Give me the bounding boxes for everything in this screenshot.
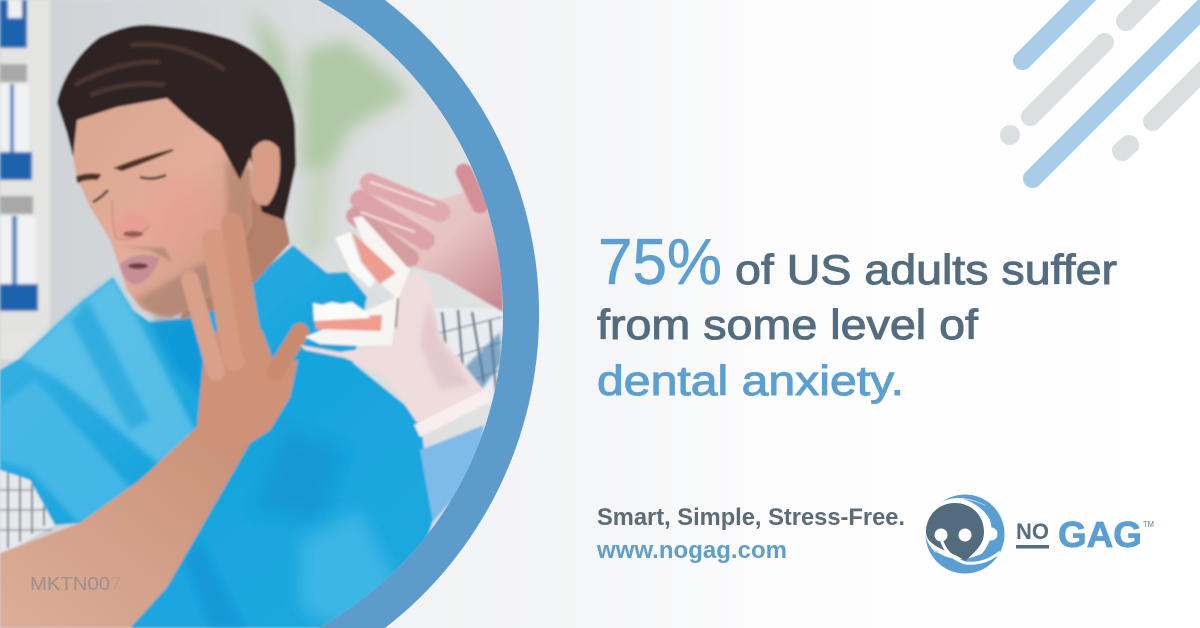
logo: No Gag [925,494,1154,574]
hair [57,25,295,180]
plaid shirt, patient's right [435,308,503,404]
nose [112,200,150,239]
website: www.nogag.com [596,537,787,564]
blurred plant [250,5,410,260]
watermark code [32,577,120,590]
shirt sleeve [420,425,484,522]
decorative diagonal stripes [1000,0,1200,188]
logo wordmark GAG: GAG [1058,514,1142,555]
lower gloved hand [300,272,490,437]
dental model [305,216,410,346]
photo: patient recoiling from dental model [0,0,510,628]
logo wordmark NO: NO [1016,519,1049,544]
tagline: Smart, Simple, Stress-Free. [597,504,905,531]
blue circular ring [0,0,539,628]
ear [251,140,280,205]
photo base colour [0,0,510,628]
blue dental gown [0,245,433,628]
headline line two: from some level of [597,301,978,348]
lips [120,255,160,285]
trademark: TM [1143,520,1154,529]
headline line one: of US adults suffer [735,246,1117,293]
75% figure: 75% [598,225,722,298]
raised hand [190,224,300,455]
raised arm [0,427,250,628]
logo icon [925,494,1004,574]
logo underline [1016,545,1049,548]
neck [179,192,291,322]
upper gloved hand [350,172,503,312]
hair highlights [75,44,225,95]
closed eyes [93,175,166,202]
headline line three: dental anxiety. [597,357,904,404]
blurred shelves with binders [0,0,50,360]
face [73,98,252,320]
watermark code: 7 [111,574,121,594]
plaid shirt, lower left [0,470,55,556]
headline [597,225,1117,404]
photo background wall [0,0,503,538]
eyebrows [77,150,173,182]
watermark code: MKTN00 [30,574,110,594]
back of hair behind ear [245,125,296,220]
